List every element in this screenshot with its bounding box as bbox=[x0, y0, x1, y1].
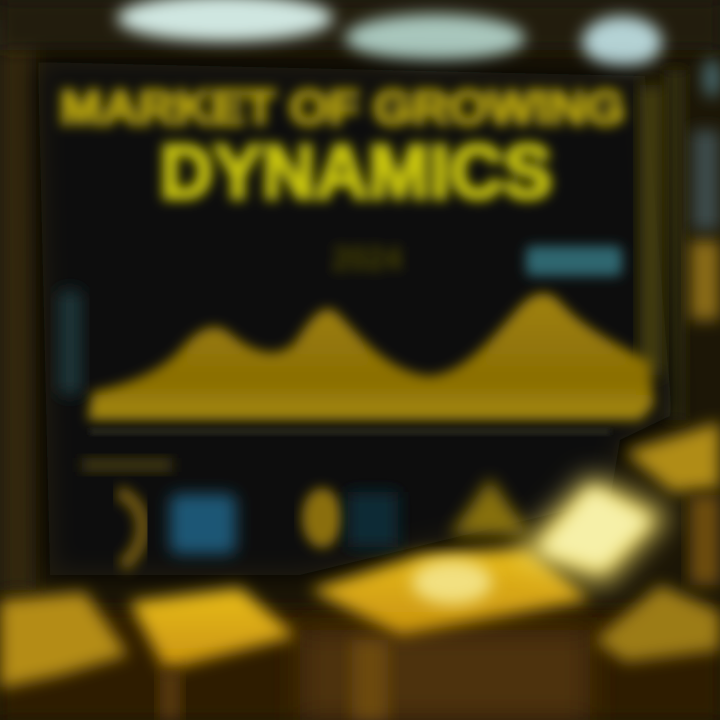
title bbox=[60, 82, 625, 215]
vertical axis bar bbox=[58, 290, 82, 395]
title: DYNAMICS bbox=[160, 130, 552, 215]
small labels: 2024 bbox=[332, 240, 402, 278]
area chart bbox=[88, 293, 654, 420]
blue panel bbox=[170, 494, 236, 554]
desks in foreground bbox=[0, 422, 720, 720]
ceiling lights bbox=[117, 0, 720, 98]
bright laptop glow bbox=[412, 475, 670, 604]
axis tick row bbox=[90, 428, 610, 435]
gold triangle icon bbox=[450, 478, 530, 535]
dark blue panel bbox=[348, 492, 398, 547]
gold crescent icon bbox=[118, 492, 143, 566]
lower left label bbox=[82, 458, 172, 472]
gold circle icon bbox=[302, 488, 342, 548]
board right edge bbox=[640, 85, 662, 375]
chart board bbox=[38, 62, 672, 575]
small labels bbox=[332, 240, 622, 278]
title: MARKET OF GROWING bbox=[60, 82, 625, 135]
